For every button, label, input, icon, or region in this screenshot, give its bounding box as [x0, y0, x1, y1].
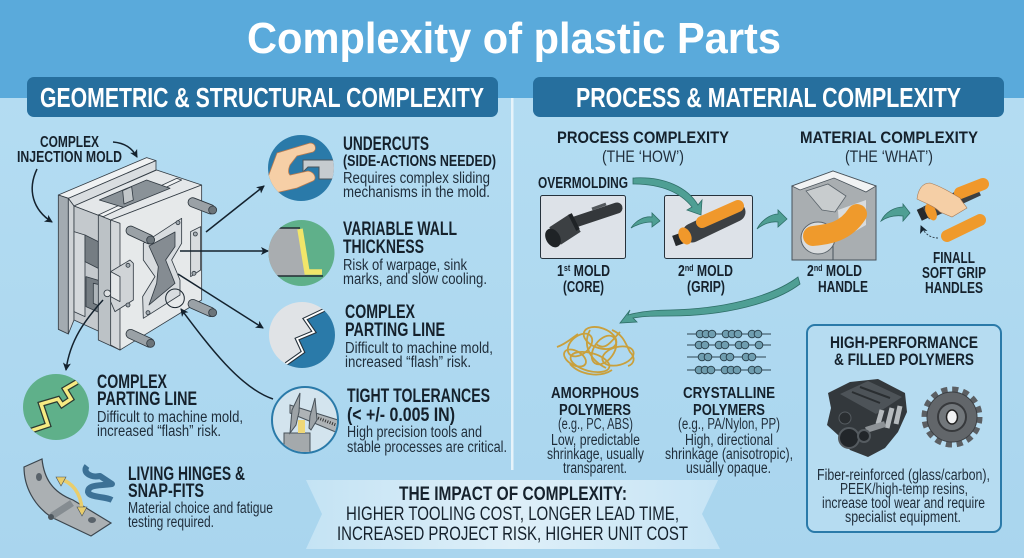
text: mold labels: MOLD: [823, 263, 862, 280]
panel: high-performance and filled polymers: PEEK/high-temp resins,: [840, 481, 968, 498]
heading: process complexity: PROCESS COMPLEXITY: [557, 128, 730, 147]
text: undercuts: [343, 134, 496, 201]
icon: gear: [925, 390, 979, 444]
banner: impact of complexity: THE IMPACT OF COMPLEXITY:: [399, 484, 627, 505]
banner: impact of complexity: HIGHER TOOLING COST, LONGER LEAD TIME,: [346, 504, 679, 525]
panel: high-performance and filled polymers: HIGH-PERFORMANCE: [830, 333, 978, 352]
text: amorphous polymers: (e.g., PC, ABS): [558, 416, 633, 433]
text: tight tolerances: High precision tools and: [347, 424, 482, 441]
text: undercuts: UNDERCUTS: [343, 134, 429, 155]
text: tight tolerances: [347, 386, 507, 456]
label: complex injection mold: INJECTION MOLD: [17, 149, 122, 166]
text: amorphous polymers: [547, 385, 644, 477]
icon: complex parting line blue: [269, 302, 335, 368]
text: mold labels: nd: [685, 263, 694, 273]
text: mold labels: HANDLES: [925, 280, 983, 297]
panel: process and material complexity: [538, 128, 1001, 532]
text: crystalline polymers: [665, 385, 793, 477]
text: living hinges and snap-fits: [128, 464, 273, 531]
heading: material complexity: [800, 128, 979, 166]
text: amorphous polymers: POLYMERS: [559, 402, 631, 419]
text: complex parting line left: PARTING LINE: [97, 389, 197, 410]
text: crystalline polymers: CRYSTALLINE: [683, 385, 775, 402]
text: living hinges and snap-fits: SNAP-FITS: [128, 481, 204, 502]
box: second mold grip: [664, 196, 752, 258]
text: mold labels: (CORE): [563, 279, 604, 296]
panel: high-performance and filled polymers: & FILLED POLYMERS: [834, 350, 974, 369]
text: variable wall thickness: Risk of warpage, sink: [343, 257, 467, 274]
text: mold labels: SOFT GRIP: [922, 265, 986, 282]
text: amorphous polymers: Low, predictable: [551, 432, 640, 449]
text: tight tolerances: stable processes are critical.: [347, 439, 507, 456]
text: crystalline polymers: High, directional: [685, 432, 773, 449]
text: complex parting line left: increased “flash” risk.: [97, 423, 221, 440]
heading: process complexity: (THE ‘HOW’): [602, 147, 684, 166]
icon: crystalline polymers beads: [687, 330, 771, 374]
banner: impact of complexity: INCREASED PROJECT RISK, HIGHER UNIT COST: [337, 524, 688, 545]
icon: mold block handle: [792, 171, 876, 260]
box: first mold core: [540, 196, 626, 258]
text: mold labels: 2: [807, 263, 816, 280]
text: undercuts: (SIDE-ACTIONS NEEDED): [343, 153, 496, 170]
text: mold labels: MOLD: [694, 263, 733, 280]
icon: injection mold: [58, 158, 217, 350]
text: complex parting line right: increased “flash” risk.: [345, 354, 471, 371]
arrows: teal process flow: [620, 178, 910, 323]
panel: high-performance and filled polymers: specialist equipment.: [845, 509, 961, 526]
label: overmolding: OVERMOLDING: [538, 175, 628, 192]
text: crystalline polymers: usually opaque.: [686, 460, 771, 477]
text: complex parting line right: Difficult to machine mold,: [345, 340, 493, 357]
label: complex injection mold: [17, 134, 122, 166]
text: amorphous polymers: shrinkage, usually: [547, 446, 644, 463]
text: living hinges and snap-fits: LIVING HINGES &: [128, 464, 245, 485]
heading: material complexity: MATERIAL COMPLEXITY: [800, 128, 979, 147]
text: amorphous polymers: transparent.: [563, 460, 627, 477]
text: variable wall thickness: marks, and slow cooling.: [343, 271, 487, 288]
banner: impact of complexity: [306, 480, 720, 549]
icon: final handles: [917, 183, 983, 238]
icon: engine: [827, 379, 907, 457]
title: Complexity of plastic Parts: [247, 14, 781, 63]
text: mold labels: [557, 250, 986, 297]
text: crystalline polymers: shrinkage (anisotropic),: [665, 446, 793, 463]
text: undercuts: Requires complex sliding: [343, 170, 490, 187]
heading: process and material complexity: [533, 77, 1004, 117]
text: variable wall thickness: THICKNESS: [343, 237, 424, 258]
panel: high-performance and filled polymers: [807, 325, 1001, 532]
text: crystalline polymers: (e.g., PA/Nylon, PP): [678, 416, 780, 433]
arrows: mold callouts: [32, 142, 273, 399]
icon: variable wall thickness: [268, 220, 334, 286]
text: tight tolerances: (< +/- 0.005 IN): [347, 405, 455, 426]
text: complex parting line right: [345, 302, 493, 371]
icon: living hinge: [24, 459, 112, 536]
text: complex parting line right: COMPLEX: [345, 302, 415, 323]
text: complex parting line right: PARTING LINE: [345, 320, 445, 341]
icon: complex parting line green: [23, 374, 89, 440]
panel: geometric complexity: [17, 134, 507, 536]
text: mold labels: nd: [814, 263, 823, 273]
text: complex parting line left: [97, 372, 243, 440]
icon: amorphous polymers tangle: [557, 323, 636, 376]
text: variable wall thickness: VARIABLE WALL: [343, 219, 457, 240]
text: mold labels: MOLD: [570, 263, 610, 280]
text: living hinges and snap-fits: testing required.: [128, 514, 214, 531]
text: mold labels: HANDLE: [818, 279, 868, 296]
text: amorphous polymers: AMORPHOUS: [551, 385, 639, 402]
text: variable wall thickness: [343, 219, 487, 288]
icon: undercuts hand: [268, 135, 336, 201]
text: mold labels: st: [564, 263, 570, 273]
text: living hinges and snap-fits: Material choice and fatigue: [128, 500, 273, 517]
heading: material complexity: (THE ‘WHAT’): [845, 147, 933, 166]
icon: tight tolerances caliper: [272, 387, 338, 459]
text: mold labels: (GRIP): [687, 279, 725, 296]
text: complex parting line left: COMPLEX: [97, 372, 167, 393]
heading: geometric and structural complexity: GEOMETRIC & STRUCTURAL COMPLEXITY: [40, 82, 484, 113]
text: complex parting line left: Difficult to machine mold,: [97, 409, 243, 426]
text: undercuts: mechanisms in the mold.: [343, 184, 490, 201]
text: mold labels: 2: [678, 263, 687, 280]
text: mold labels: FINALL: [933, 250, 975, 267]
heading: geometric and structural complexity: [27, 77, 498, 117]
text: mold labels: 1: [557, 263, 566, 280]
text: tight tolerances: TIGHT TOLERANCES: [347, 386, 490, 407]
label: complex injection mold: COMPLEX: [40, 134, 100, 151]
text: crystalline polymers: POLYMERS: [693, 402, 765, 419]
heading: process complexity: [557, 128, 730, 166]
